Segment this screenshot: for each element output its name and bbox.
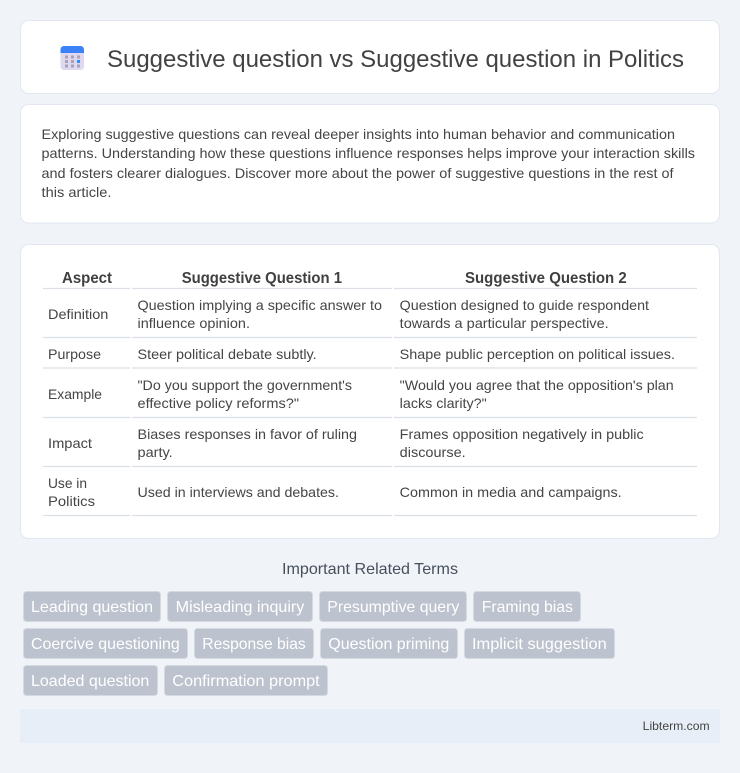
row: purpose: Purpose <box>48 346 101 362</box>
tag: loaded question: Loaded question <box>31 673 149 690</box>
tag: misleading inquiry <box>168 592 312 622</box>
row: impact <box>43 426 697 466</box>
row: example <box>43 377 697 418</box>
tag: coercive questioning: Coercive questioning <box>31 636 180 653</box>
tag: implicit suggestion: Implicit suggestion <box>472 636 607 653</box>
tag: response bias: Response bias <box>202 636 306 653</box>
tag: leading question: Leading question <box>31 599 153 616</box>
tag: presumptive query <box>320 592 466 622</box>
tag: leading question <box>24 592 160 622</box>
tag: framing bias <box>474 592 580 622</box>
table header row: Aspect <box>62 270 113 287</box>
panel: comparison table <box>20 244 720 538</box>
row: definition <box>43 297 697 338</box>
tag: question priming <box>320 628 458 658</box>
row: impact: party. <box>138 444 173 460</box>
icon: calendar <box>60 46 84 70</box>
heading: important related terms: Important Related Terms <box>282 561 458 578</box>
row: purpose: Shape public perception on political issues. <box>400 346 675 362</box>
row: impact: discourse. <box>400 444 466 460</box>
row: purpose <box>43 346 697 368</box>
row: use in politics: Politics <box>48 493 95 509</box>
panel: introduction <box>20 104 720 223</box>
tag: coercive questioning <box>24 628 188 658</box>
row: impact: Biases responses in favor of ruling <box>138 426 357 442</box>
intro paragraph: Exploring suggestive questions can reveal deeper insights into human behavior and communication <box>42 126 675 142</box>
row: impact: Impact <box>48 435 92 451</box>
tag: implicit suggestion <box>464 628 614 658</box>
intro paragraph: this article. <box>42 184 112 200</box>
table header row: Suggestive Question 1 <box>182 270 342 287</box>
row: example: "Would you agree that the opposition's plan <box>400 377 674 393</box>
row: impact: Frames opposition negatively in public <box>400 426 644 442</box>
intro paragraph: and fosters clearer dialogues. Discover more about the power of suggestive questions in the rest of <box>42 165 674 181</box>
row: definition: Question implying a specific answer to <box>138 297 382 313</box>
intro paragraph <box>42 126 695 200</box>
row: purpose: Steer political debate subtly. <box>138 346 317 362</box>
tag: confirmation prompt <box>164 666 328 696</box>
row: example: "Do you support the government's <box>138 377 352 393</box>
tag: presumptive query: Presumptive query <box>327 599 459 616</box>
tag: confirmation prompt: Confirmation prompt <box>172 673 320 690</box>
row: example: Example <box>48 386 102 402</box>
row: example: effective policy reforms?" <box>138 395 299 411</box>
row: definition: influence opinion. <box>138 315 250 331</box>
row: use in politics <box>43 475 697 516</box>
footer <box>20 709 720 743</box>
title: Suggestive question vs Suggestive question in Politics <box>107 46 684 73</box>
row: definition: towards a particular perspective. <box>400 315 609 331</box>
tag: response bias <box>194 628 314 658</box>
tag: loaded question <box>24 666 158 696</box>
tag: misleading inquiry: Misleading inquiry <box>176 599 304 616</box>
tag list <box>24 592 614 696</box>
row: use in politics: Use in <box>48 475 87 491</box>
row: definition: Question designed to guide respondent <box>400 297 649 313</box>
table header row: Suggestive Question 2 <box>465 270 627 287</box>
tag: question priming: Question priming <box>328 636 449 653</box>
row: example: lacks clarity?" <box>400 395 487 411</box>
panel: header <box>20 20 720 94</box>
footer credit: Libterm.com <box>643 719 710 733</box>
row: definition: Definition <box>48 306 108 322</box>
tag: framing bias: Framing bias <box>482 599 573 616</box>
intro paragraph: patterns. Understanding how these questions influence responses helps improve your interaction skills <box>42 145 695 161</box>
row: use in politics: Used in interviews and debates. <box>138 484 339 500</box>
row: use in politics: Common in media and campaigns. <box>400 484 622 500</box>
table header row <box>43 270 697 288</box>
